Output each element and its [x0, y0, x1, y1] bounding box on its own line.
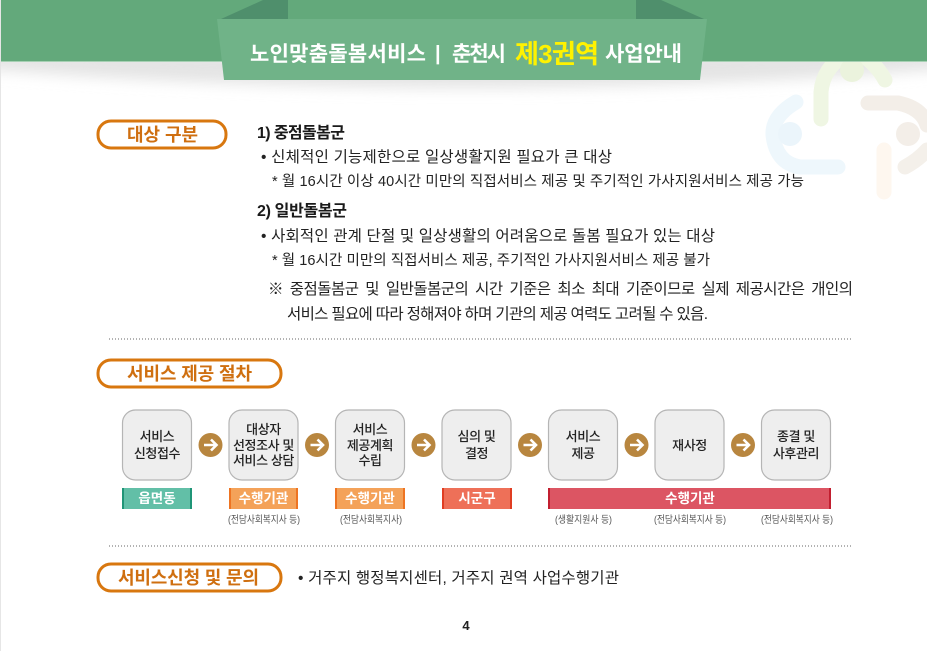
section label: 대상 구분: 대상 구분 — [127, 125, 198, 145]
arrow 2 — [305, 433, 329, 457]
step 5: 제공 — [571, 446, 595, 461]
step 2 — [229, 410, 298, 480]
section label: 서비스 제공 절차: 서비스 제공 절차 — [127, 364, 252, 384]
step 2: 대상자 — [246, 422, 281, 437]
step 7: 종결 및 — [777, 429, 815, 444]
target classification text: 2) 일반돌봄군 — [257, 202, 347, 220]
tag: 수행기관 (wide): 수행기관 — [665, 491, 715, 506]
tag: 수행기관 (2): 수행기관 — [239, 491, 289, 506]
step 4 — [442, 410, 511, 480]
step 5 — [548, 410, 618, 480]
tag: 수행기관 (wide): (생활지원사 등) — [555, 513, 612, 526]
step 1 — [122, 410, 192, 480]
section label: 서비스 제공 절차 — [98, 360, 281, 387]
target classification text: * 월 16시간 미만의 직접서비스 제공, 주기적인 가사지원서비스 제공 불가 — [272, 252, 710, 269]
target classification text: 1) 중점돌봄군 — [257, 124, 345, 142]
process flow — [122, 410, 830, 480]
tag: 수행기관 (wide): (전담사회복지사 등) — [654, 514, 726, 526]
step 3: 서비스 — [353, 422, 388, 437]
step 6: 재사정 — [672, 438, 707, 453]
tag: 시군구: 시군구 — [458, 491, 496, 506]
step 6 — [655, 410, 724, 480]
target classification text: • 신체적인 기능제한으로 일상생활지원 필요가 큰 대상 — [261, 148, 612, 166]
step 3: 제공계획 — [347, 438, 393, 453]
step 3: 수립 — [358, 453, 382, 468]
target classification text — [257, 124, 853, 323]
title ribbon: | — [435, 43, 441, 65]
tag: 수행기관 (2): (전담사회복지사 등) — [228, 514, 300, 526]
step 1: 신청접수 — [134, 446, 181, 461]
section label: 서비스신청 및 문의: 서비스신청 및 문의 — [118, 568, 259, 588]
arrow 5 — [624, 433, 648, 457]
step 4: 결정 — [465, 446, 488, 461]
tag: 수행기관 (wide): (전담사회복지사 등) — [761, 514, 833, 526]
tag: 읍면동: 읍면동 — [138, 491, 176, 506]
arrow 3 — [412, 433, 436, 457]
section label: 대상 구분 — [98, 121, 226, 148]
page number: 4 — [462, 618, 470, 633]
title ribbon: 노인맞춤돌봄서비스 — [250, 43, 426, 66]
target classification text: ※ 중점돌봄군 및 일반돌봄군의 시간 기준은 최소 최대 기준이므로 실제 제공시간은 개인의 — [268, 280, 853, 298]
target classification text: • 사회적인 관계 단절 및 일상생활의 어려움으로 돌봄 필요가 있는 대상 — [261, 227, 715, 245]
tag: 수행기관 (3): 수행기관 — [345, 491, 395, 506]
tag: 시군구 — [442, 488, 512, 509]
tag: 수행기관 (3): (전담사회복지사) — [340, 514, 402, 526]
header band — [1, 0, 927, 62]
step 7 — [762, 410, 830, 480]
arrow 1 — [198, 433, 222, 457]
step 7: 사후관리 — [773, 446, 819, 461]
title ribbon: 제3권역 — [515, 39, 599, 69]
step 3 — [336, 410, 404, 480]
step 4: 심의 및 — [458, 429, 496, 444]
tag: 읍면동 — [122, 488, 192, 509]
tag: 수행기관 (wide) — [548, 488, 833, 526]
target classification text: 서비스 필요에 따라 정해져야 하며 기관의 제공 여력도 고려될 수 있음. — [287, 305, 708, 323]
step 2: 서비스 상담 — [233, 453, 294, 468]
step 1: 서비스 — [140, 429, 175, 444]
arrow 4 — [518, 433, 542, 457]
step 2: 선정조사 및 — [233, 438, 294, 453]
inquiry text: • 거주지 행정복지센터, 거주지 권역 사업수행기관 — [298, 569, 619, 587]
title ribbon: 사업안내 — [605, 43, 682, 66]
logo watermark — [773, 55, 927, 192]
step 5: 서비스 — [566, 429, 601, 444]
section label: 서비스신청 및 문의 — [98, 564, 281, 591]
arrow 6 — [731, 433, 755, 457]
tag: 수행기관 (2) — [228, 488, 300, 526]
header shadow — [0, 50, 927, 88]
title ribbon: 춘천시 — [452, 43, 506, 66]
target classification text: * 월 16시간 이상 40시간 미만의 직접서비스 제공 및 주기적인 가사지원서비스 제공 가능 — [272, 173, 804, 190]
tag: 수행기관 (3) — [335, 488, 405, 526]
title ribbon — [217, 19, 707, 80]
